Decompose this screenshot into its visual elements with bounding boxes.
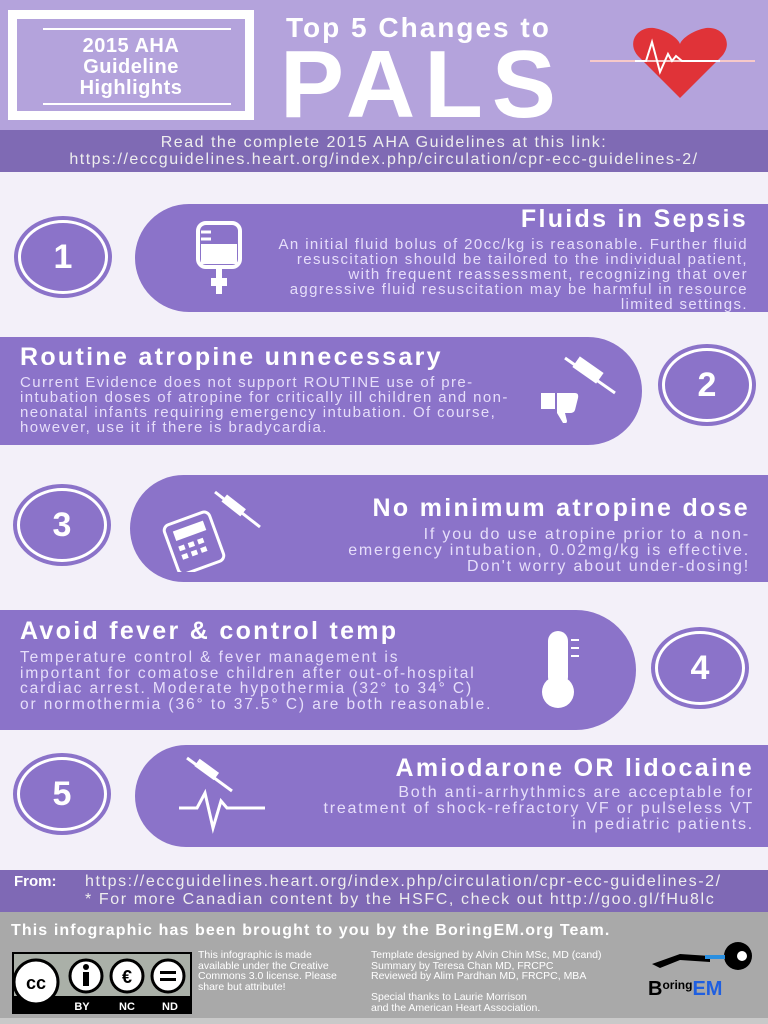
panel 5: amiodarone or lidocaine — [135, 745, 768, 847]
circle 3 — [13, 484, 111, 566]
text — [323, 784, 754, 833]
header box: 2015 AHA Guideline Highlights: Guideline — [83, 56, 179, 78]
text: intubation doses of atropine for critically ill children and non- — [20, 389, 509, 406]
panel 4: avoid fever — [0, 610, 636, 730]
text: or normothermia (36° to 37.5° C) are both reasonable. — [20, 696, 492, 712]
credits — [371, 949, 602, 1014]
icon: heart with heartbeat — [590, 28, 755, 98]
text — [278, 236, 748, 313]
license text: This infographic is made — [198, 949, 312, 961]
heading: No minimum atropine dose — [373, 494, 750, 522]
header box: 2015 AHA Guideline Highlights: Highlights — [80, 77, 182, 99]
from strip: From: — [14, 873, 56, 890]
icon: cc license badge: ND — [162, 1001, 178, 1013]
panel 3: no minimum atropine dose — [130, 475, 768, 582]
bottom strip — [0, 1018, 768, 1024]
logo: BoringEM — [648, 942, 752, 1000]
panel 2: routine atropine — [0, 337, 642, 445]
from strip: https://eccguidelines.heart.org/index.php/circulation/cpr-ecc-guidelines-2/ — [85, 873, 722, 890]
circle 1: 1 — [54, 238, 72, 276]
text: emergency intubation, 0.02mg/kg is effective. — [348, 542, 750, 559]
header box: 2015 AHA Guideline Highlights: 2015 AHA — [83, 35, 179, 57]
credits: Template designed by Alvin Chin MSc, MD (cand) — [371, 949, 602, 961]
icon: calculator and syringe — [162, 491, 261, 572]
circle 5 — [13, 753, 111, 835]
circle 3: 3 — [53, 506, 71, 544]
circle 2: 2 — [698, 366, 716, 404]
text: Both anti-arrhythmics are acceptable for — [398, 784, 754, 801]
text: Current Evidence does not support ROUTINE use of pre- — [20, 374, 474, 391]
heading: Routine atropine unnecessary — [20, 343, 443, 371]
license text — [198, 949, 337, 992]
icon: cc license badge — [12, 952, 192, 1014]
text — [20, 374, 509, 436]
from strip — [0, 870, 768, 912]
text: however, use it if there is bradycardia. — [20, 419, 328, 436]
footer — [0, 912, 768, 1018]
text: important for comatose children after out-of-hospital — [20, 664, 476, 682]
circle 2 — [658, 344, 756, 426]
link strip: Read the complete 2015 AHA Guidelines at this link: — [161, 134, 607, 151]
circle 1 — [14, 216, 112, 298]
link strip — [0, 130, 768, 172]
footer heading: This infographic has been brought to you by the BoringEM.org Team. — [11, 922, 610, 939]
heading: Avoid fever & control temp — [20, 617, 398, 645]
text — [20, 649, 492, 712]
title: Top 5 Changes to — [286, 12, 551, 43]
text: neonatal infants requiring emergency intubation. Of course, — [20, 404, 496, 421]
circle 4 — [651, 627, 749, 709]
text: If you do use atropine prior to a non- — [424, 526, 750, 543]
text: treatment of shock-refractory VF or pulseless VT — [323, 800, 754, 817]
text: Don't worry about under-dosing! — [467, 558, 750, 575]
icon: cc license badge: cc — [26, 973, 46, 993]
logo: BoringEM: BoringEM — [648, 978, 722, 1000]
text: in pediatric patients. — [572, 816, 754, 833]
text: cardiac arrest. Moderate hypothermia (32° to 34° C) — [20, 680, 473, 697]
text — [348, 526, 750, 575]
icon: syringe and thumbs down — [541, 356, 616, 423]
icon: IV bag — [196, 221, 242, 294]
circle 4: 4 — [691, 648, 709, 686]
text: An initial fluid bolus of 20cc/kg is reasonable. Further fluid — [278, 236, 748, 253]
icon: cc license badge: BY — [74, 1001, 90, 1013]
text: resuscitation should be tailored to the individual patient, — [297, 251, 748, 268]
credits: Special thanks to Laurie Morrison — [371, 991, 527, 1003]
heading: Fluids in Sepsis — [521, 205, 748, 233]
heading: Amiodarone OR lidocaine — [395, 754, 754, 782]
text: limited settings. — [621, 296, 748, 313]
credits: Summary by Teresa Chan MD, FRCPC — [371, 960, 553, 972]
license text: share but attribute! — [198, 980, 286, 992]
license text: Commons 3.0 license. Please — [198, 970, 337, 982]
icon: cc license badge: NC — [119, 1001, 135, 1013]
from strip: * For more Canadian content by the HSFC, check out http://goo.gl/fHu8lc — [85, 891, 715, 908]
license text: available under the Creative — [198, 960, 329, 972]
credits: Reviewed by Alim Pardhan MD, FRCPC, MBA — [371, 970, 586, 982]
icon: thermometer — [542, 631, 579, 708]
header — [0, 0, 768, 130]
text: aggressive fluid resuscitation may be harmful in resource — [290, 281, 748, 298]
header box: 2015 AHA Guideline Highlights — [8, 10, 254, 120]
icon: syringe and ECG — [179, 756, 265, 834]
panel 1: fluids in sepsis — [135, 204, 768, 312]
circle 5: 5 — [53, 774, 71, 812]
icon: cc license badge: € — [122, 967, 132, 987]
text: with frequent reassessment, recognizing that over — [348, 266, 748, 283]
credits: and the American Heart Association. — [371, 1002, 540, 1014]
link strip: https://eccguidelines.heart.org/index.php/circulation/cpr-ecc-guidelines-2/ — [69, 151, 699, 168]
title: PALS — [280, 31, 565, 138]
text: Temperature control & fever management is — [20, 649, 399, 666]
